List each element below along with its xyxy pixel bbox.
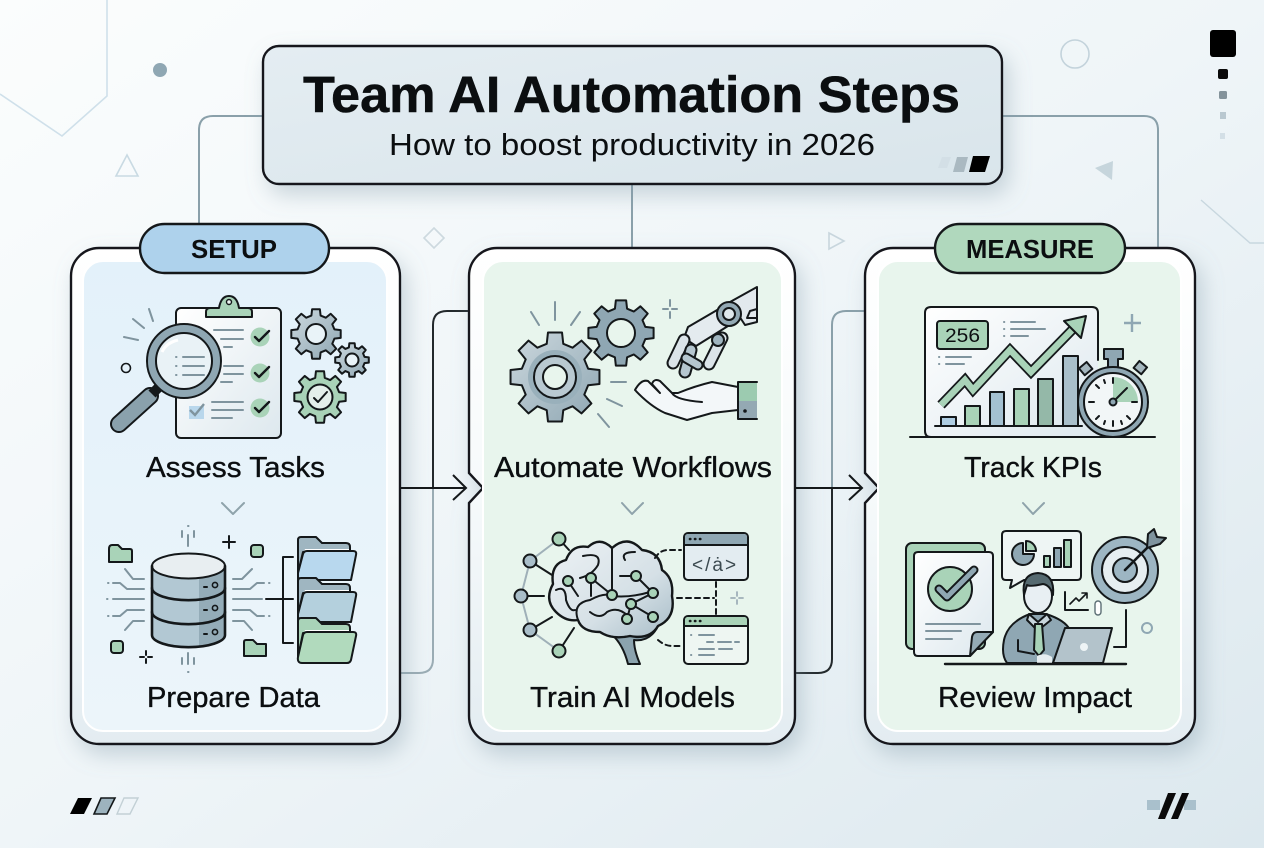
measure badge: MEASURE xyxy=(966,234,1094,264)
title box xyxy=(263,46,1002,184)
label: automate workflows: Automate Workflows xyxy=(494,452,772,484)
icon: review impact xyxy=(906,529,1166,664)
label: prepare data: Prepare Data xyxy=(147,682,321,714)
panel: automate xyxy=(469,248,795,744)
footer marks left xyxy=(70,798,138,814)
panel: setup xyxy=(71,248,400,744)
chevron xyxy=(222,503,244,514)
setup badge: SETUP xyxy=(191,234,277,264)
loop connector: automate to measure xyxy=(795,311,865,673)
label: train ai models: Train AI Models xyxy=(530,682,735,714)
title decor marks xyxy=(938,156,990,172)
chevron xyxy=(1023,503,1044,514)
label: assess tasks: Assess Tasks xyxy=(146,452,325,484)
icon: clipboard and magnifier xyxy=(119,296,281,438)
icon: kpi chart and stopwatch: 256 xyxy=(945,326,980,347)
measure badge xyxy=(935,224,1125,273)
subtitle text: How to boost productivity in 2026 xyxy=(389,127,875,162)
footer marks right xyxy=(1147,793,1196,819)
loop connector: setup to automate xyxy=(400,311,469,673)
icon: setup gears xyxy=(291,309,369,423)
icon: database and folders xyxy=(107,526,356,672)
chevron xyxy=(622,503,643,514)
label: track kpis: Track KPIs xyxy=(964,452,1102,484)
icon: kpi chart and stopwatch xyxy=(910,307,1155,437)
icon: brain network xyxy=(514,532,748,664)
connector lines from title to panels xyxy=(199,116,1158,249)
arrow: setup to automate xyxy=(400,475,466,500)
icon: gears and robot hand xyxy=(511,287,757,427)
setup badge xyxy=(140,224,329,273)
decorative background shapes xyxy=(0,0,1264,249)
arrow: automate to measure xyxy=(795,475,862,500)
panel: measure xyxy=(865,248,1195,744)
label: review impact: Review Impact xyxy=(938,682,1132,714)
icon: brain network: </ȧ> xyxy=(692,555,738,576)
title text: Team AI Automation Steps xyxy=(303,66,960,123)
